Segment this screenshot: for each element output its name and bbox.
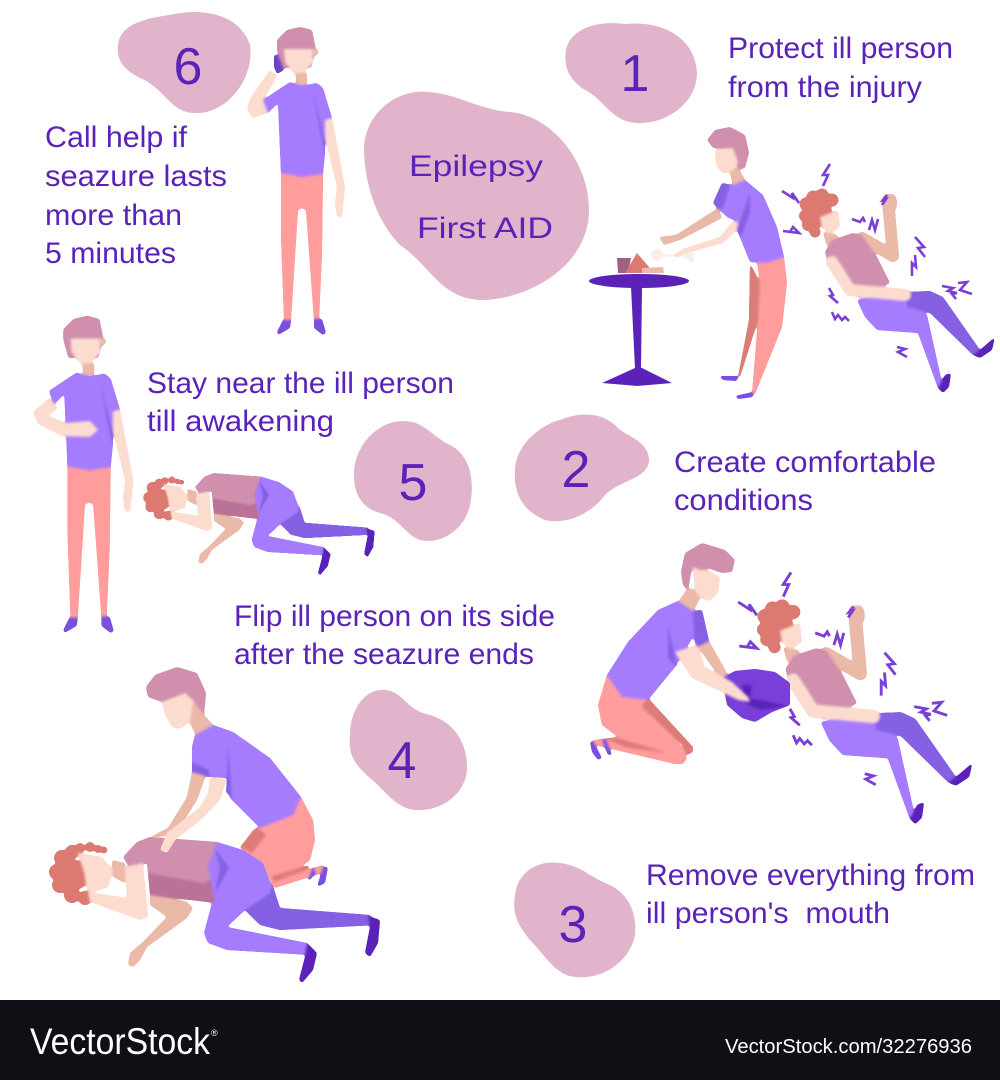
- figure: man on phone: [247, 27, 345, 335]
- step 6 badge: 6: [174, 38, 202, 96]
- step 4 badge: 4: [388, 732, 416, 790]
- figure: person lying on side: [49, 837, 380, 983]
- panel: step 3 kneeling helper: [514, 543, 975, 977]
- figure: man turning person: [146, 667, 328, 888]
- step 6 badge: [118, 12, 251, 113]
- step 3 badge: [514, 862, 635, 977]
- step 5 text: till awakening: [147, 405, 334, 438]
- figure: man standing by: [33, 316, 133, 633]
- title: [409, 150, 553, 245]
- step 3 text: [646, 859, 975, 930]
- step 2 text: [674, 446, 936, 517]
- step 1 text: [728, 32, 953, 104]
- step 1 badge: 1: [621, 45, 649, 103]
- footer bar: [0, 1000, 1000, 1080]
- step 4 badge: [350, 690, 467, 810]
- step 4 text: [234, 600, 555, 671]
- step 6 text: seazure lasts: [45, 160, 227, 193]
- panel: step 2 comfortable conditions: [515, 415, 936, 521]
- step 1 text: from the injury: [728, 71, 922, 104]
- footer url: VectorStock.com/32276936: [725, 1036, 972, 1058]
- panel: step 1 protect: [565, 23, 995, 399]
- step 4 text: after the seazure ends: [234, 638, 534, 671]
- table with objects: [589, 249, 695, 386]
- title blob: [364, 92, 589, 300]
- step 2 badge: 2: [562, 441, 590, 499]
- step 2 badge: [515, 415, 649, 521]
- registered mark: ®: [211, 1028, 218, 1038]
- step 4 text: Flip ill person on its side: [234, 600, 555, 633]
- step 5 badge: [354, 421, 472, 541]
- figure: person recovering on side: [143, 473, 375, 575]
- step 2 text: conditions: [674, 484, 813, 517]
- figure: man clearing table: [659, 127, 787, 399]
- title: Epilepsy: [409, 150, 543, 183]
- step 6 text: more than: [45, 199, 182, 232]
- step 1 badge: [565, 23, 697, 123]
- step 5 text: Stay near the ill person: [147, 367, 454, 400]
- step 3 badge: 3: [559, 896, 587, 954]
- step 2 text: Create comfortable: [674, 446, 936, 479]
- step 6 text: [45, 121, 227, 270]
- step 6 text: 5 minutes: [45, 237, 176, 270]
- helper front arm: [160, 777, 227, 853]
- step 5 text: [147, 367, 454, 438]
- panel: step 4 flip on side: [49, 600, 555, 983]
- step 6 text: Call help if: [45, 121, 188, 154]
- panel: step 5 stay near: [33, 316, 472, 633]
- step 1 text: Protect ill person: [728, 32, 953, 65]
- title: First AID: [417, 212, 553, 245]
- figure: seizure person with pillow: [738, 572, 972, 824]
- step 3 text: Remove everything from: [646, 859, 975, 892]
- footer logo: VectorStock: [30, 1021, 210, 1062]
- panel: step 6 call help: [45, 12, 345, 335]
- step 3 text: ill person's mouth: [646, 897, 890, 930]
- figure: person having seizure: [782, 164, 995, 393]
- figure: man kneeling with pillow: [590, 543, 790, 764]
- step 5 badge: 5: [399, 454, 427, 512]
